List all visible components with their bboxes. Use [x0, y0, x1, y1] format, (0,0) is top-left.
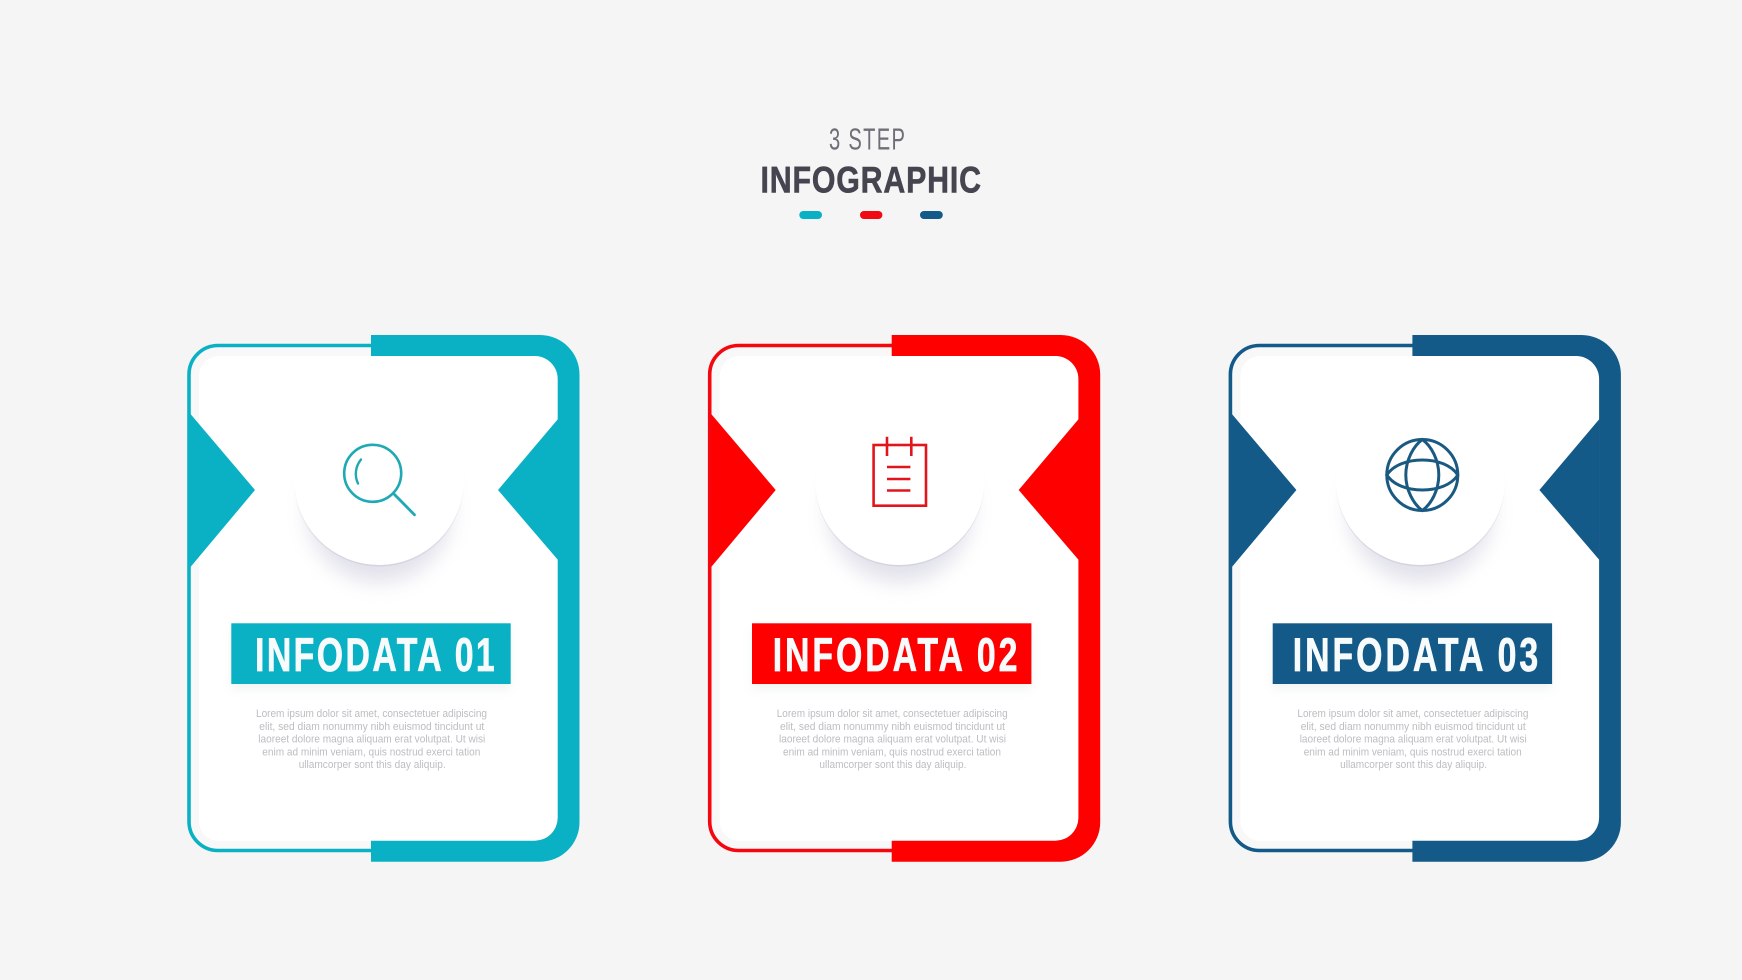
- left triangle: [190, 414, 255, 567]
- description text: Lorem ipsum dolor sit amet, consectetuer adipiscing: [256, 708, 487, 720]
- panel: infodata 01: [189, 335, 580, 862]
- card white area: [199, 356, 558, 841]
- label: infodata 01: [231, 623, 511, 690]
- card outline: [1230, 346, 1530, 850]
- description text: ullamcorper sont this day aliquip.: [819, 759, 966, 771]
- card white area: [1240, 356, 1599, 841]
- icon circle: [1335, 396, 1505, 582]
- icon: globe: [1387, 440, 1458, 510]
- description text: [1297, 708, 1528, 771]
- label: infodata 02: INFODATA 02: [773, 629, 1018, 681]
- icon circle: [294, 396, 464, 582]
- label: infodata 02: [752, 623, 1031, 690]
- left triangle: [711, 414, 776, 567]
- description text: elit, sed diam nonummy nibh euismod tincidunt ut: [780, 721, 1006, 733]
- description text: elit, sed diam nonummy nibh euismod tincidunt ut: [1301, 721, 1526, 733]
- description text: laoreet dolore magna aliquam erat volutpat. Ut wisi: [779, 734, 1006, 746]
- description text: [777, 708, 1008, 771]
- description text: Lorem ipsum dolor sit amet, consectetuer adipiscing: [777, 708, 1008, 720]
- label: infodata 01: INFODATA 01: [255, 629, 495, 681]
- description text: [256, 708, 487, 771]
- icon: notepad: [874, 437, 926, 506]
- icon: magnifier: [344, 445, 414, 515]
- description text: laoreet dolore magna aliquam erat volutpat. Ut wisi: [258, 734, 485, 746]
- description text: ullamcorper sont this day aliquip.: [299, 759, 446, 771]
- right triangle: [498, 419, 558, 560]
- description text: enim ad minim veniam, quis nostrud exerci tation: [783, 746, 1001, 758]
- description text: laoreet dolore magna aliquam erat volutpat. Ut wisi: [1300, 734, 1527, 746]
- description text: ullamcorper sont this day aliquip.: [1340, 759, 1487, 771]
- right triangle: [1539, 419, 1599, 560]
- icon circle: [815, 396, 985, 582]
- right triangle: [1019, 419, 1079, 560]
- card outline: [710, 346, 1010, 850]
- description text: Lorem ipsum dolor sit amet, consectetuer adipiscing: [1297, 708, 1528, 720]
- left triangle: [1232, 414, 1296, 567]
- thick accent frame: [892, 335, 1100, 862]
- panel: infodata 02: [710, 335, 1100, 862]
- card white area: [720, 356, 1079, 841]
- title: 3 step infographic: [760, 124, 981, 201]
- label: infodata 03: INFODATA 03: [1293, 629, 1538, 681]
- card outline: [189, 346, 489, 850]
- heading: INFOGRAPHIC: [760, 160, 981, 201]
- description text: enim ad minim veniam, quis nostrud exerci tation: [262, 746, 480, 758]
- thick accent frame: [371, 335, 580, 862]
- description text: elit, sed diam nonummy nibh euismod tincidunt ut: [259, 721, 485, 733]
- colour legend pills: [799, 211, 943, 219]
- subtitle: 3 STEP: [829, 124, 905, 157]
- description text: enim ad minim veniam, quis nostrud exerci tation: [1304, 746, 1522, 758]
- panel: infodata 03: [1230, 335, 1621, 862]
- thick accent frame: [1412, 335, 1621, 862]
